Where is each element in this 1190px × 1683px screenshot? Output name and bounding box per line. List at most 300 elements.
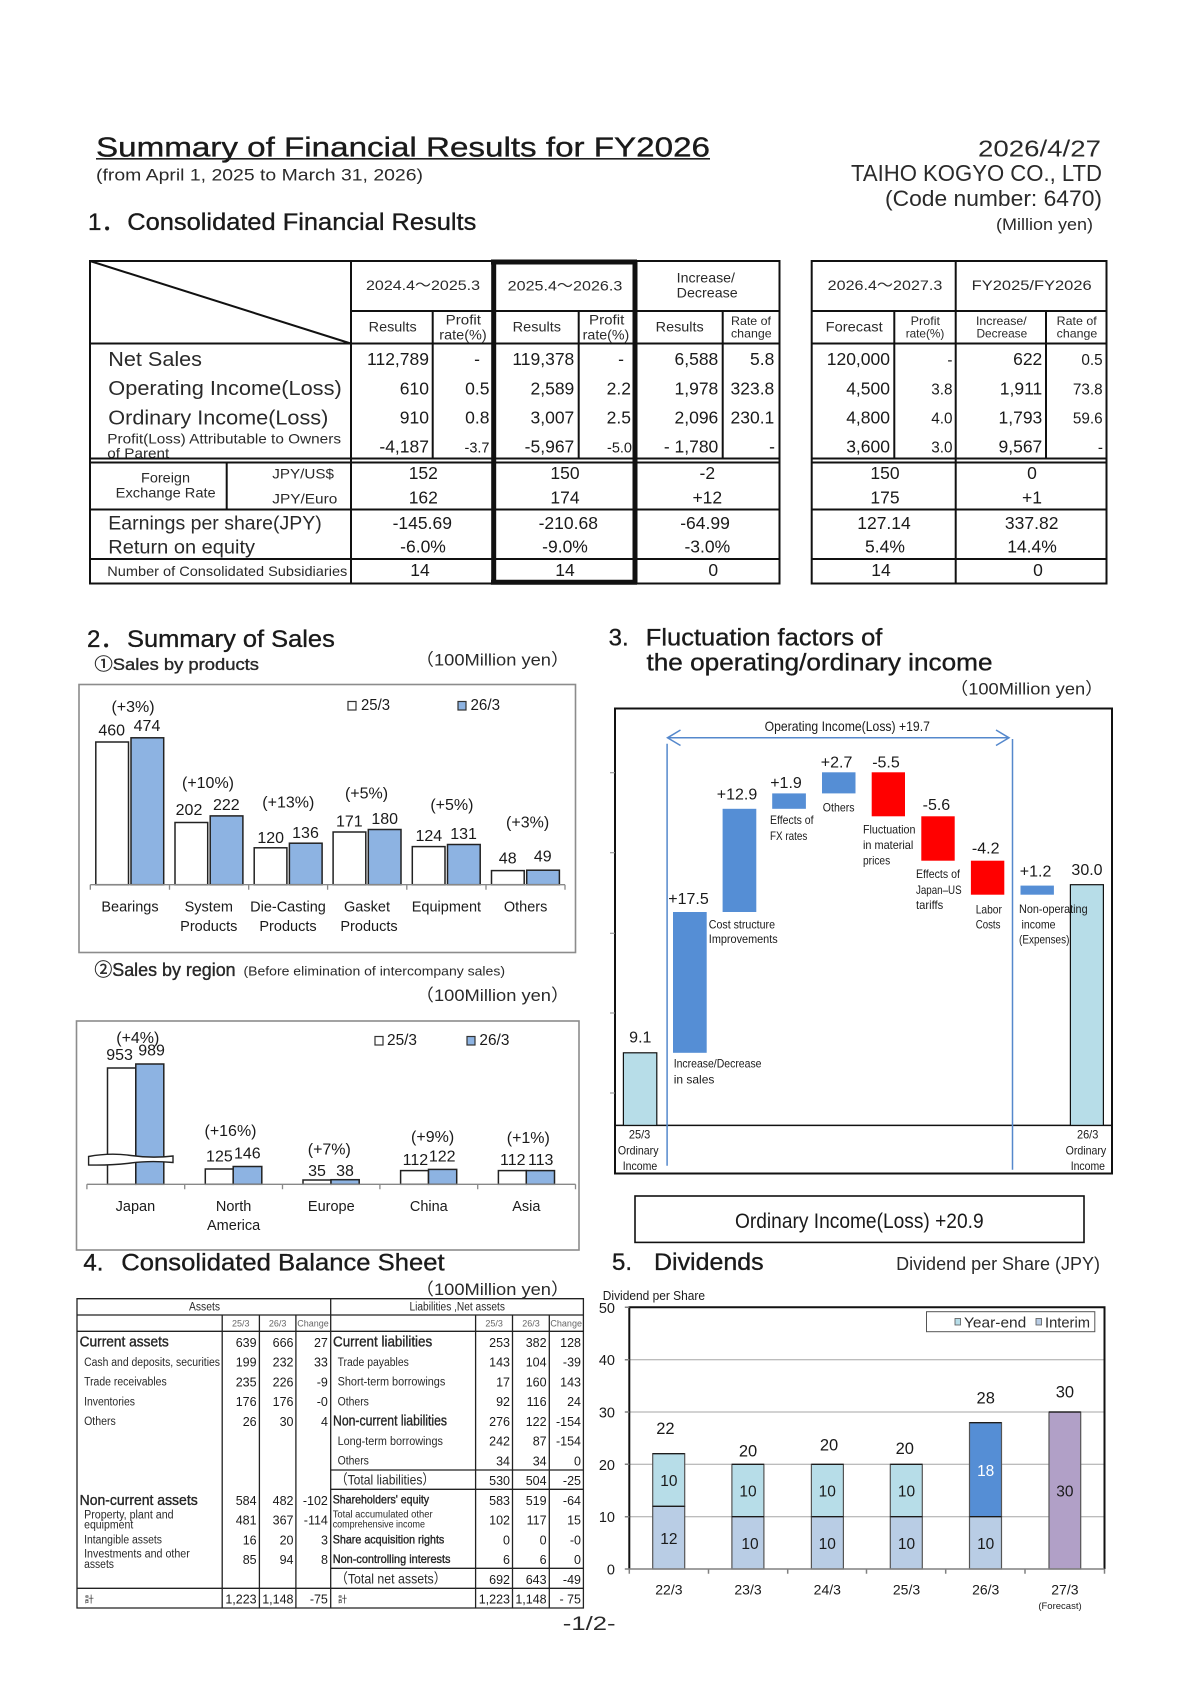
category labels: Products xyxy=(180,919,237,935)
asset values: -114 xyxy=(304,1514,328,1528)
asset values: 226 xyxy=(273,1375,294,1389)
table headers: change xyxy=(731,326,772,340)
liability and net asset values: -154 xyxy=(556,1435,581,1449)
waterfall factor labels: (Expenses) xyxy=(1019,933,1069,947)
results values: 4.0 xyxy=(931,410,952,427)
category labels: Asia xyxy=(512,1199,541,1215)
rates and per-share values: 0 xyxy=(1027,463,1037,483)
unit label: （100Million yen） xyxy=(416,651,569,670)
row labels: Foreign xyxy=(141,469,190,485)
value labels: 49 xyxy=(534,848,552,866)
category labels xyxy=(116,1199,541,1234)
plot frame and axes xyxy=(625,1307,1104,1574)
value labels: (+1%) xyxy=(507,1130,550,1147)
axis labels: Ordinary xyxy=(1066,1143,1106,1157)
axis xyxy=(90,885,565,890)
table headers: Results xyxy=(513,319,561,335)
waterfall value labels: -4.2 xyxy=(972,841,1000,858)
bar totals: 20 xyxy=(820,1437,838,1455)
bars xyxy=(96,738,559,885)
liability and net asset values: 102 xyxy=(489,1514,510,1528)
rates and per-share values: 0 xyxy=(708,560,718,580)
asset labels: Trade receivables xyxy=(84,1377,167,1389)
liability and net asset values: 143 xyxy=(489,1356,510,1370)
company details: 2026/4/27 xyxy=(978,136,1101,162)
waterfall factor labels: FX rates xyxy=(770,829,807,843)
value labels: 474 xyxy=(134,718,160,735)
asset labels: Property, plant and xyxy=(84,1509,174,1521)
liability and net asset values: 1,148 xyxy=(515,1592,547,1606)
results values: 120,000 xyxy=(827,349,890,369)
axis labels: 26/3 xyxy=(1077,1128,1099,1142)
y axis labels xyxy=(599,1301,615,1578)
asset values: 235 xyxy=(236,1375,257,1389)
row labels: JPY/US$ xyxy=(272,465,334,481)
stacked bars xyxy=(653,1412,1081,1569)
liability and net asset values: 583 xyxy=(489,1494,510,1508)
liability and net asset values: 34 xyxy=(496,1454,510,1468)
end bar: 26/3 xyxy=(1070,885,1103,1125)
results values: 119,378 xyxy=(512,349,574,369)
table headers: 2024.4～2025.3 xyxy=(366,277,480,293)
liability and net asset labels: 計 xyxy=(338,1593,347,1604)
liability and net asset labels: （Total liabilities） xyxy=(336,1472,434,1488)
liability and net asset values: 504 xyxy=(526,1474,547,1488)
table headers: Results xyxy=(656,319,704,335)
results values: 2.2 xyxy=(607,378,631,398)
value labels xyxy=(106,1030,554,1180)
rates and per-share values: 175 xyxy=(870,487,900,507)
asset values: 367 xyxy=(273,1514,294,1528)
asset labels: Inventories xyxy=(84,1396,135,1408)
value labels: 112 xyxy=(500,1152,526,1169)
category labels: Europe xyxy=(308,1199,355,1215)
table headers: FY2025/FY2026 xyxy=(972,277,1092,293)
waterfall factor labels: Improvements xyxy=(709,932,778,946)
liability and net asset values: 253 xyxy=(489,1336,510,1350)
liability and net asset values: 160 xyxy=(526,1375,547,1389)
value labels: 125 xyxy=(206,1148,233,1166)
heading: section 2: 2． xyxy=(87,626,124,653)
axis labels: Income xyxy=(623,1159,657,1173)
liability and net asset values: 17 xyxy=(496,1375,510,1389)
x axis labels: 25/3 xyxy=(893,1581,920,1597)
company details: (Million yen) xyxy=(996,216,1093,234)
liability and net asset values: -154 xyxy=(556,1415,581,1429)
waterfall factor labels: Non-operating xyxy=(1019,902,1088,916)
arrow: operating income span xyxy=(667,730,1012,1170)
row labels: Number of Consolidated Subsidiaries xyxy=(107,563,347,579)
asset values: 666 xyxy=(273,1336,294,1350)
results values: 3.8 xyxy=(931,381,952,398)
asset labels: Current assets xyxy=(80,1334,169,1351)
rates and per-share values: 14 xyxy=(555,560,575,580)
panel: fluctuation waterfall chart xyxy=(610,708,1112,1174)
liability and net asset values: 104 xyxy=(526,1356,547,1370)
value labels: (+5%) xyxy=(430,797,473,814)
waterfall bars: decreases xyxy=(872,772,1004,895)
value labels: 122 xyxy=(429,1148,456,1166)
legend: Interim xyxy=(1045,1314,1090,1331)
results values: 0.8 xyxy=(465,407,490,427)
segment values: 12 xyxy=(660,1531,678,1548)
asset labels: equipment xyxy=(84,1520,134,1532)
waterfall factor labels: Effects of xyxy=(916,867,960,881)
waterfall factor labels: income xyxy=(1022,917,1056,931)
results values: 73.8 xyxy=(1073,381,1103,398)
liability and net asset values: 0 xyxy=(540,1533,547,1547)
category labels: America xyxy=(207,1218,261,1234)
row labels: Ordinary Income(Loss) xyxy=(108,407,328,429)
segment values: 10 xyxy=(741,1536,759,1553)
liability and net asset values: 6 xyxy=(540,1553,547,1567)
x axis labels xyxy=(655,1581,1082,1612)
row labels xyxy=(107,349,347,579)
results values: - xyxy=(947,352,952,369)
waterfall factor labels: Effects of xyxy=(770,813,814,827)
liability and net asset values: 1,223 xyxy=(479,1592,510,1606)
y axis labels: 0 xyxy=(607,1562,615,1578)
table headers: Profit xyxy=(446,311,481,327)
y axis labels: 20 xyxy=(599,1458,615,1474)
waterfall value labels: -5.6 xyxy=(923,797,950,814)
liability and net asset values xyxy=(479,1336,581,1606)
table headers: rate(%) xyxy=(439,326,487,342)
heading: section 2: Summary of Sales xyxy=(127,626,335,653)
asset values: 481 xyxy=(236,1514,257,1528)
asset labels: Investments and other xyxy=(84,1549,190,1561)
results values: 3,600 xyxy=(846,436,890,456)
chart title: Dividend per Share xyxy=(603,1288,705,1303)
waterfall factor labels: Labor xyxy=(976,902,1002,916)
results values: - xyxy=(618,349,624,369)
rates and per-share values: -64.99 xyxy=(680,513,730,533)
axis labels: Income xyxy=(1071,1159,1105,1173)
x axis labels: 26/3 xyxy=(972,1581,1000,1597)
waterfall factor labels: Japan–US xyxy=(916,883,962,897)
value labels: 38 xyxy=(336,1163,354,1180)
rates and per-share values: 14 xyxy=(871,560,891,580)
table headers: Decrease xyxy=(677,285,738,301)
table headers: Profit xyxy=(911,314,941,328)
rates and per-share values: 337.82 xyxy=(1005,513,1058,533)
start bar: 25/3 xyxy=(623,1053,657,1125)
x axis labels: (Forecast) xyxy=(1038,1601,1082,1612)
rates and per-share values: -210.68 xyxy=(539,513,598,533)
waterfall factor labels: in material xyxy=(863,838,913,852)
category labels: Die-Casting xyxy=(250,900,326,916)
panel: consolidated results table xyxy=(90,260,1106,584)
y axis labels: 30 xyxy=(599,1406,615,1422)
value labels: 48 xyxy=(499,851,517,868)
liability and net asset labels: Non-controlling interests xyxy=(333,1552,450,1566)
rates and per-share values: 150 xyxy=(550,463,580,483)
waterfall value labels: 9.1 xyxy=(629,1029,652,1046)
asset labels: 計 xyxy=(85,1593,94,1604)
waterfall value labels: -5.5 xyxy=(872,754,900,771)
results values: 323.8 xyxy=(731,378,774,398)
results values: 5.8 xyxy=(750,349,774,369)
liability and net asset values: 122 xyxy=(526,1415,547,1429)
table headers: Rate of xyxy=(1057,314,1097,328)
waterfall factor labels: tariffs xyxy=(916,898,943,912)
segment values: 10 xyxy=(739,1484,757,1501)
axis labels: Ordinary xyxy=(618,1143,658,1157)
results values: 4,800 xyxy=(846,407,890,427)
balance sheet headers xyxy=(189,1302,582,1328)
results values: 2,096 xyxy=(675,407,718,427)
balance sheet headers: 26/3 xyxy=(269,1318,286,1328)
row labels: JPY/Euro xyxy=(272,490,338,506)
value labels: 112 xyxy=(403,1152,428,1169)
value labels: (+3%) xyxy=(111,699,155,716)
rates and per-share values: +1 xyxy=(1022,487,1042,507)
arrow label: Operating Income(Loss) +19.7 xyxy=(765,718,930,734)
page number: -1/2- xyxy=(563,1614,616,1635)
table headers: rate(%) xyxy=(583,326,629,342)
results values: 2,589 xyxy=(531,378,574,398)
table headers: Decrease xyxy=(976,326,1028,340)
rates and per-share values: 174 xyxy=(550,487,580,507)
bars xyxy=(108,1064,554,1184)
bar totals: 28 xyxy=(977,1389,995,1407)
value labels: 171 xyxy=(336,814,363,831)
legend: 26/3 xyxy=(479,1032,509,1049)
rates and per-share values: 127.14 xyxy=(857,513,911,533)
results values: -3.7 xyxy=(464,440,490,456)
balance sheet headers: Change xyxy=(297,1318,329,1328)
callout: ordinary income change xyxy=(635,1196,1084,1242)
category labels: Equipment xyxy=(412,900,481,916)
y axis labels: 50 xyxy=(599,1301,615,1317)
row labels: of Parent xyxy=(107,445,169,461)
category labels: Gasket xyxy=(344,900,390,916)
unit label: dividend per share: Dividend per Share (JPY) xyxy=(896,1254,1100,1274)
balance sheet headers: Liabilities ,Net assets xyxy=(410,1302,505,1314)
asset values: 85 xyxy=(243,1553,257,1567)
value labels: (+9%) xyxy=(411,1129,454,1146)
company details: (Code number: 6470) xyxy=(885,186,1102,211)
table headers: Forecast xyxy=(826,319,883,335)
rates and per-share values: +12 xyxy=(692,487,722,507)
segment values: 18 xyxy=(977,1463,994,1480)
results values: 2.5 xyxy=(607,407,631,427)
liability and net asset labels: Current liabilities xyxy=(333,1334,432,1351)
segment values: 10 xyxy=(660,1473,678,1490)
value labels: 113 xyxy=(528,1152,554,1169)
waterfall factor labels: Cost structure xyxy=(709,917,775,931)
panel: balance sheet table xyxy=(77,1299,583,1608)
heading: section 4: Consolidated Balance Sheet xyxy=(121,1250,445,1276)
liability and net asset labels xyxy=(333,1334,450,1604)
asset values: 639 xyxy=(236,1336,257,1350)
unit label: （100Million yen） xyxy=(416,986,569,1005)
bar totals xyxy=(656,1384,1074,1461)
table grid xyxy=(90,260,1106,584)
value labels: 136 xyxy=(292,825,319,842)
legend xyxy=(375,1032,509,1049)
rates and per-share values: 14.4% xyxy=(1007,537,1057,557)
company details: TAIHO KOGYO CO., LTD xyxy=(851,160,1102,186)
value labels: (+5%) xyxy=(345,785,388,802)
y axis labels: 10 xyxy=(599,1510,615,1526)
asset labels: assets xyxy=(84,1559,114,1571)
value labels: 222 xyxy=(213,797,240,814)
asset values: -102 xyxy=(303,1494,328,1508)
liability and net asset values: 0 xyxy=(503,1533,510,1547)
row labels: Exchange Rate xyxy=(116,484,216,500)
sub-heading: sales by region: (Before elimination of intercompany sales) xyxy=(244,964,505,979)
row labels: Return on equity xyxy=(108,537,256,558)
liability and net asset values: 242 xyxy=(489,1435,510,1449)
results values: - xyxy=(474,349,480,369)
liability and net asset labels: Long-term borrowings xyxy=(338,1436,443,1448)
row labels: Net Sales xyxy=(108,349,202,371)
segment values: 10 xyxy=(898,1484,915,1501)
segment values: 10 xyxy=(977,1536,995,1553)
category labels: Bearings xyxy=(101,900,159,916)
asset values: -9 xyxy=(317,1375,328,1389)
results values: 910 xyxy=(400,407,429,427)
value labels: 131 xyxy=(450,826,477,843)
value labels: 124 xyxy=(415,828,442,845)
legend: 25/3 xyxy=(361,697,390,714)
liability and net asset values: 276 xyxy=(489,1415,510,1429)
value labels: 989 xyxy=(138,1043,165,1060)
value labels: (+3%) xyxy=(506,814,549,832)
legend xyxy=(926,1312,1095,1332)
category labels: Japan xyxy=(116,1199,155,1215)
bar totals: 22 xyxy=(656,1420,675,1438)
waterfall value labels xyxy=(629,754,1103,1046)
results values: -5.0 xyxy=(607,440,632,456)
liability and net asset values: 530 xyxy=(489,1474,510,1488)
segment values: 30 xyxy=(1056,1484,1074,1501)
x axis labels: 23/3 xyxy=(734,1581,762,1597)
results values: 622 xyxy=(1013,349,1042,369)
asset values: 20 xyxy=(280,1533,294,1547)
asset values: 1,223 xyxy=(225,1592,257,1606)
waterfall value labels: +1.2 xyxy=(1020,863,1051,880)
rates and per-share values: 162 xyxy=(409,487,438,507)
value labels xyxy=(98,699,552,868)
liability and net asset values: 692 xyxy=(489,1573,510,1587)
heading: section 3: Fluctuation factors of xyxy=(646,625,883,652)
liability and net asset values: 117 xyxy=(527,1514,547,1528)
segment values xyxy=(660,1463,1074,1553)
asset values: 16 xyxy=(243,1533,257,1547)
asset values: 8 xyxy=(321,1553,328,1567)
liability and net asset labels: Trade payables xyxy=(338,1357,409,1369)
axis labels xyxy=(618,1128,1106,1173)
liability and net asset values: 15 xyxy=(567,1514,581,1528)
rates and per-share values xyxy=(393,463,1058,580)
panel: dividends stacked bar chart xyxy=(599,1288,1104,1612)
liability and net asset labels: Shareholders' equity xyxy=(333,1492,429,1506)
liability and net asset labels: （Total net assets） xyxy=(336,1570,446,1586)
value labels: 146 xyxy=(234,1146,261,1163)
balance sheet headers: 25/3 xyxy=(232,1318,250,1328)
asset labels: Intangible assets xyxy=(84,1534,162,1546)
rates and per-share values: -2 xyxy=(700,463,715,483)
value labels: 180 xyxy=(371,811,398,828)
table headers: change xyxy=(1057,326,1098,340)
liability and net asset values: -0 xyxy=(570,1533,581,1547)
waterfall value labels: +12.9 xyxy=(717,787,757,804)
category labels: North xyxy=(216,1199,251,1215)
bar totals: 30 xyxy=(1056,1384,1074,1402)
category labels xyxy=(101,900,547,935)
heading: section 3: the operating/ordinary income xyxy=(646,650,992,677)
table headers: 2026.4～2027.3 xyxy=(828,277,943,293)
liability and net asset values: 0 xyxy=(574,1454,581,1468)
table headers: Increase/ xyxy=(976,314,1027,328)
liability and net asset labels: Others xyxy=(338,1396,369,1408)
asset labels: Cash and deposits, securities xyxy=(84,1357,220,1369)
rates and per-share values: -6.0% xyxy=(400,537,446,557)
results values: - 1,780 xyxy=(664,436,719,456)
heading: section 1: Consolidated Financial Results xyxy=(127,209,476,236)
segment values: 10 xyxy=(819,1536,836,1553)
x axis labels: 27/3 xyxy=(1051,1581,1079,1597)
asset values: 482 xyxy=(273,1494,294,1508)
sub-heading: sales by region: ②Sales by region xyxy=(94,960,236,980)
heading: section 5: Dividends xyxy=(654,1249,764,1276)
value labels: 460 xyxy=(98,722,125,739)
results values: 0.5 xyxy=(465,378,490,398)
results values: 230.1 xyxy=(731,407,774,427)
category labels: System xyxy=(185,900,233,916)
asset values: -75 xyxy=(310,1592,328,1606)
asset values: 199 xyxy=(236,1356,257,1370)
subtitle: period: (from April 1, 2025 to March 31, 2026) xyxy=(96,166,423,184)
legend: Year-end xyxy=(964,1314,1026,1331)
row labels: Earnings per share(JPY) xyxy=(108,513,322,534)
results values: 1,793 xyxy=(999,407,1042,427)
category labels: China xyxy=(410,1199,449,1215)
axis break mark xyxy=(89,1154,173,1165)
liability and net asset labels: Short-term borrowings xyxy=(338,1377,446,1389)
liability and net asset values: 34 xyxy=(533,1454,547,1468)
rates and per-share values: 152 xyxy=(409,463,438,483)
liability and net asset labels: Total accumulated other xyxy=(333,1510,433,1521)
waterfall factor labels: Others xyxy=(823,801,854,815)
liability and net asset values: 116 xyxy=(527,1395,547,1409)
heading: section 1: 1． xyxy=(88,209,125,236)
panel: sales by products chart xyxy=(79,684,576,952)
legend xyxy=(348,697,500,714)
heading: section 4: 4. xyxy=(83,1250,103,1276)
liability and net asset values: 24 xyxy=(567,1395,581,1409)
asset values: 27 xyxy=(314,1336,328,1350)
waterfall factor labels xyxy=(674,801,1088,1086)
liability and net asset values: -64 xyxy=(563,1494,581,1508)
asset values: 26 xyxy=(243,1415,257,1429)
results values xyxy=(367,349,1103,456)
balance sheet headers: 26/3 xyxy=(522,1318,540,1328)
rates and per-share values: 0 xyxy=(1033,560,1043,580)
heading: section 3: 3. xyxy=(609,625,629,652)
asset labels xyxy=(80,1334,220,1604)
value labels: (+10%) xyxy=(182,775,234,792)
liability and net asset labels: Non-current liabilities xyxy=(333,1413,447,1430)
liability and net asset labels: Share acquisition rights xyxy=(333,1532,444,1546)
asset values: 232 xyxy=(273,1356,294,1370)
gridlines xyxy=(629,1360,1104,1517)
value labels: (+4%) xyxy=(116,1030,159,1047)
results values: 4,500 xyxy=(846,378,890,398)
balance sheet grid xyxy=(77,1299,583,1608)
